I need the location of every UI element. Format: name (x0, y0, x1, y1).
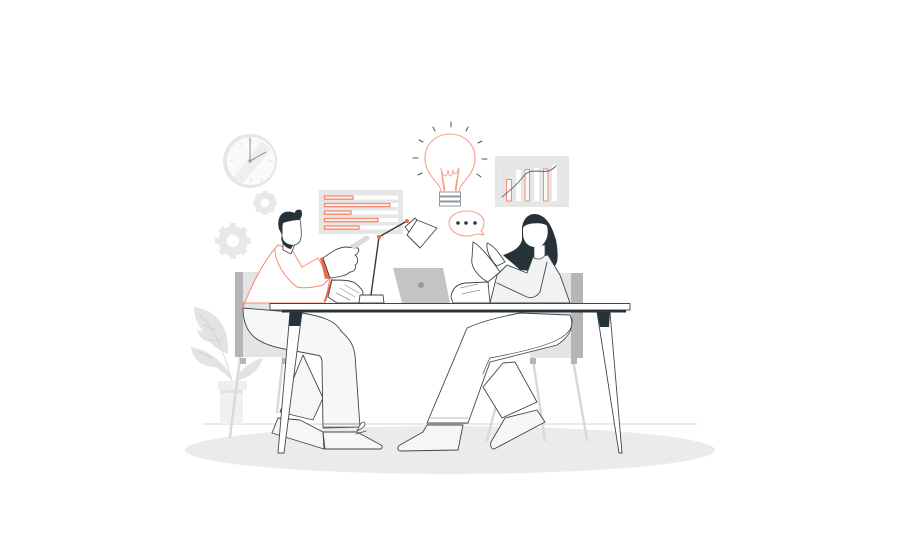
back leg and shoe (272, 355, 324, 449)
pointing hand (323, 247, 359, 278)
desk lamp (359, 218, 437, 303)
torso (490, 255, 570, 303)
speech bubble (449, 211, 484, 236)
chair: woman (487, 273, 587, 440)
front shoe (323, 432, 382, 449)
desk (270, 304, 630, 453)
lower hand (451, 282, 490, 303)
panel: horizontal bar chart (319, 190, 403, 234)
lower sleeve cuff (325, 280, 332, 301)
hair (278, 210, 302, 235)
raised hands (487, 243, 505, 266)
beard (281, 236, 293, 249)
icon: small gear (253, 191, 277, 215)
trouser cuff (429, 417, 468, 419)
woman figure (398, 214, 572, 451)
hair (503, 214, 558, 272)
pen (350, 236, 369, 249)
plant (191, 307, 263, 424)
neck (534, 245, 545, 259)
front leg (427, 313, 572, 423)
icon: large gear (215, 223, 251, 259)
arm (497, 262, 547, 298)
trouser seam (483, 318, 572, 374)
face (282, 219, 301, 245)
torso (243, 245, 330, 307)
trouser cuff line (323, 424, 360, 427)
sleeve (275, 250, 330, 288)
panel: column and line chart (495, 156, 569, 207)
front shoe (398, 425, 463, 451)
lower hand (328, 280, 363, 303)
cuff (320, 257, 332, 279)
laptop (393, 268, 450, 303)
icon: wall clock (223, 134, 277, 188)
floor shadow (185, 426, 715, 474)
chair: man (230, 272, 288, 437)
man figure (243, 210, 382, 449)
front leg (243, 308, 360, 428)
floor line (203, 423, 697, 425)
icon: light bulb (413, 122, 487, 206)
face (523, 223, 548, 247)
neck (283, 240, 295, 254)
shoelace (356, 422, 366, 434)
back leg and shoe (483, 362, 545, 449)
